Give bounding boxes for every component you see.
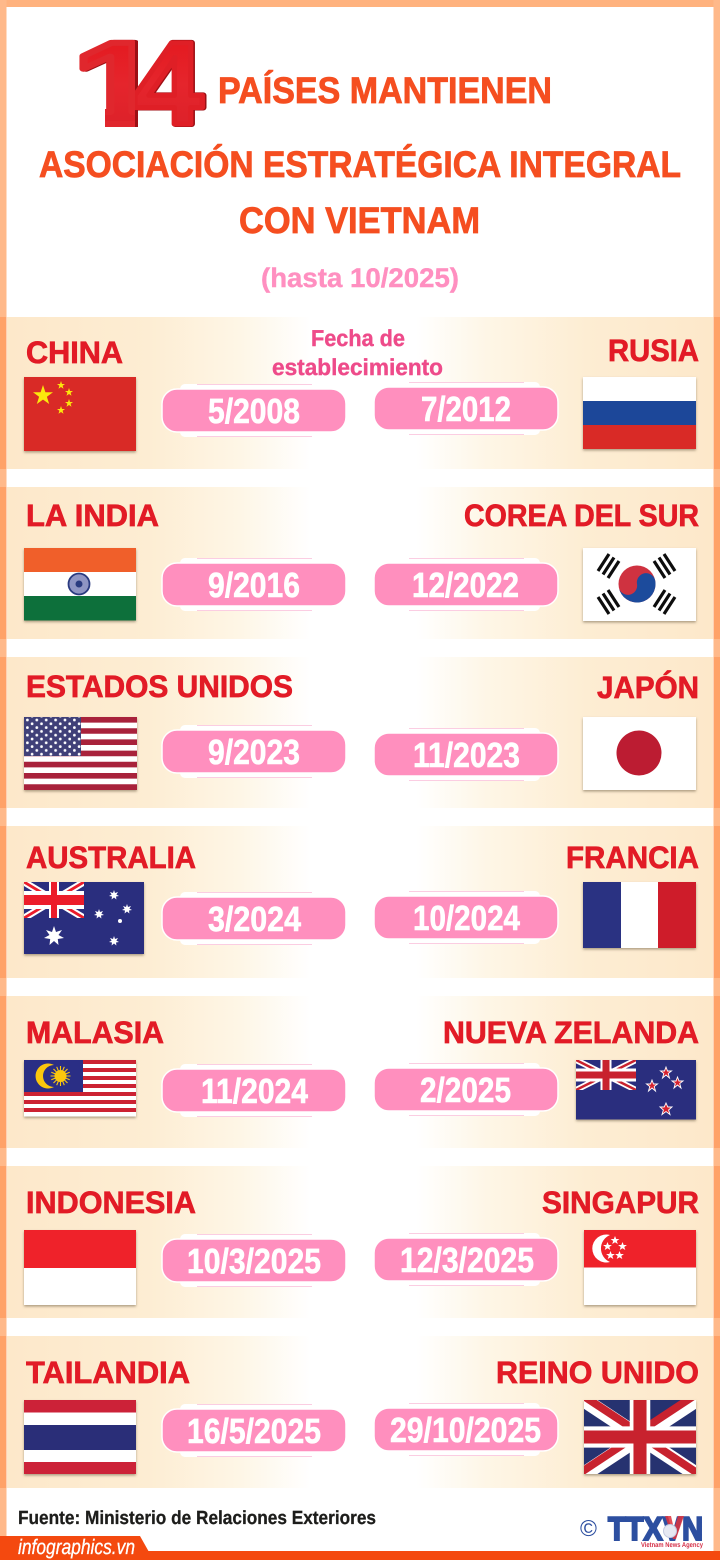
date pill: La India: 9/2016: [208, 566, 300, 605]
flag: New Zealand: [576, 1060, 696, 1120]
country name: Tailandia: TAILANDIA: [26, 1355, 190, 1390]
flag: United Kingdom: [578, 1391, 702, 1476]
date pill: Malasia: [162, 1064, 346, 1117]
date pill: Rusia: 7/2012: [421, 390, 511, 429]
country name: China: CHINA: [26, 335, 123, 370]
country name: Nueva Zelanda: NUEVA ZELANDA: [443, 1015, 699, 1050]
date pill: Australia: [162, 892, 346, 945]
flag: Japan: [583, 717, 696, 790]
country name: Malasia: MALASIA: [26, 1015, 164, 1050]
flag: Singapore: [584, 1230, 696, 1305]
flag: Australia: [24, 882, 144, 954]
source note: Fuente: Ministerio de Relaciones Exteriores: [18, 1508, 376, 1529]
date pill: Nueva Zelanda: [374, 1063, 558, 1116]
date pill: Rusia: [374, 382, 558, 435]
date pill: Corea del Sur: 12/2022: [412, 566, 519, 605]
flag: China: [24, 377, 136, 451]
title line 1: PAÍSES MANTIENEN: [218, 70, 552, 111]
column heading: establishment date: Fecha de: [311, 325, 405, 351]
big number 14: 1: [72, 18, 162, 150]
country name: Indonesia: INDONESIA: [26, 1185, 196, 1220]
country name: Corea del Sur: COREA DEL SUR: [464, 498, 699, 533]
background bands: [7, 317, 713, 1488]
flag: France: [583, 882, 696, 948]
country name: Francia: FRANCIA: [566, 840, 699, 875]
country name: Singapur: SINGAPUR: [542, 1185, 699, 1220]
country name: Australia: AUSTRALIA: [26, 840, 196, 875]
title line 3: CON VIETNAM: [239, 200, 480, 241]
row: China: [24, 335, 346, 451]
row: Francia: [374, 840, 699, 948]
flag: United States: [24, 717, 137, 790]
date pill: Singapur: 12/3/2025: [400, 1241, 534, 1280]
date pill: Indonesia: 10/3/2025: [187, 1242, 321, 1281]
flag: India: [24, 548, 136, 620]
row: La India: [24, 498, 346, 620]
column heading: establishment date: establecimiento: [272, 354, 443, 380]
date pill: Estados Unidos: 9/2023: [208, 733, 300, 772]
column heading: establishment date: [272, 325, 443, 380]
date pill: Corea del Sur: [374, 558, 558, 611]
row: Tailandia: [24, 1355, 346, 1474]
country name: Estados Unidos: ESTADOS UNIDOS: [26, 669, 293, 704]
date pill: Reino Unido: 29/10/2025: [390, 1411, 541, 1450]
date subtitle: (hasta 10/2025): [261, 263, 459, 293]
row: Australia: [24, 840, 346, 954]
date pill: Singapur: [374, 1233, 558, 1286]
date pill: Francia: 10/2024: [413, 899, 520, 938]
row: Estados Unidos: [24, 669, 346, 790]
footer bar: [0, 1536, 720, 1560]
big number 14: 4: [133, 18, 203, 150]
row: Reino Unido: [374, 1355, 702, 1476]
flag: Thailand: [24, 1400, 136, 1474]
date pill: Nueva Zelanda: 2/2025: [420, 1071, 511, 1110]
row: Corea del Sur: [374, 498, 699, 621]
date pill: Japón: [374, 728, 558, 781]
logo: TTXVN: ©: [580, 1515, 597, 1541]
row: Indonesia: [24, 1185, 346, 1305]
flag: Russia: [583, 377, 696, 449]
website label: infographics.vn: [18, 1536, 135, 1559]
date pill: Reino Unido: [374, 1403, 558, 1456]
logo: TTXVN: TTXVN: [608, 1510, 703, 1547]
date pill: Estados Unidos: [162, 725, 346, 778]
row: Malasia: [24, 1015, 346, 1117]
row: Rusia: [374, 333, 699, 449]
date pill: Tailandia: 16/5/2025: [187, 1412, 321, 1451]
date pill: Tailandia: [162, 1404, 346, 1457]
big number 14: 1: [75, 18, 165, 150]
flag: South Korea: [583, 548, 696, 621]
date pill: China: [162, 384, 346, 437]
date pill: Francia: [374, 891, 558, 944]
big number 14: 4: [134, 18, 204, 150]
date pill: Malasia: 11/2024: [201, 1072, 308, 1111]
logo: TTXVN: [580, 1510, 703, 1549]
row: Nueva Zelanda: [374, 1015, 699, 1120]
country name: Reino Unido: REINO UNIDO: [496, 1355, 699, 1390]
flag: Malaysia: [24, 1060, 136, 1116]
date pill: Indonesia: [162, 1234, 346, 1287]
country name: La India: LA INDIA: [26, 498, 159, 533]
big number 14: [79, 40, 206, 127]
date pill: China: 5/2008: [208, 392, 300, 431]
country name: Rusia: RUSIA: [608, 333, 699, 368]
date pill: La India: [162, 558, 346, 611]
row: Singapur: [374, 1185, 699, 1305]
country name: Japón: JAPÓN: [597, 670, 699, 705]
date pill: Australia: 3/2024: [208, 900, 301, 939]
flag: Indonesia: [24, 1230, 136, 1305]
date pill: Japón: 11/2023: [413, 736, 520, 775]
logo: TTXVN: Vietnam News Agency: [641, 1541, 703, 1549]
row: Japón: [374, 670, 699, 790]
